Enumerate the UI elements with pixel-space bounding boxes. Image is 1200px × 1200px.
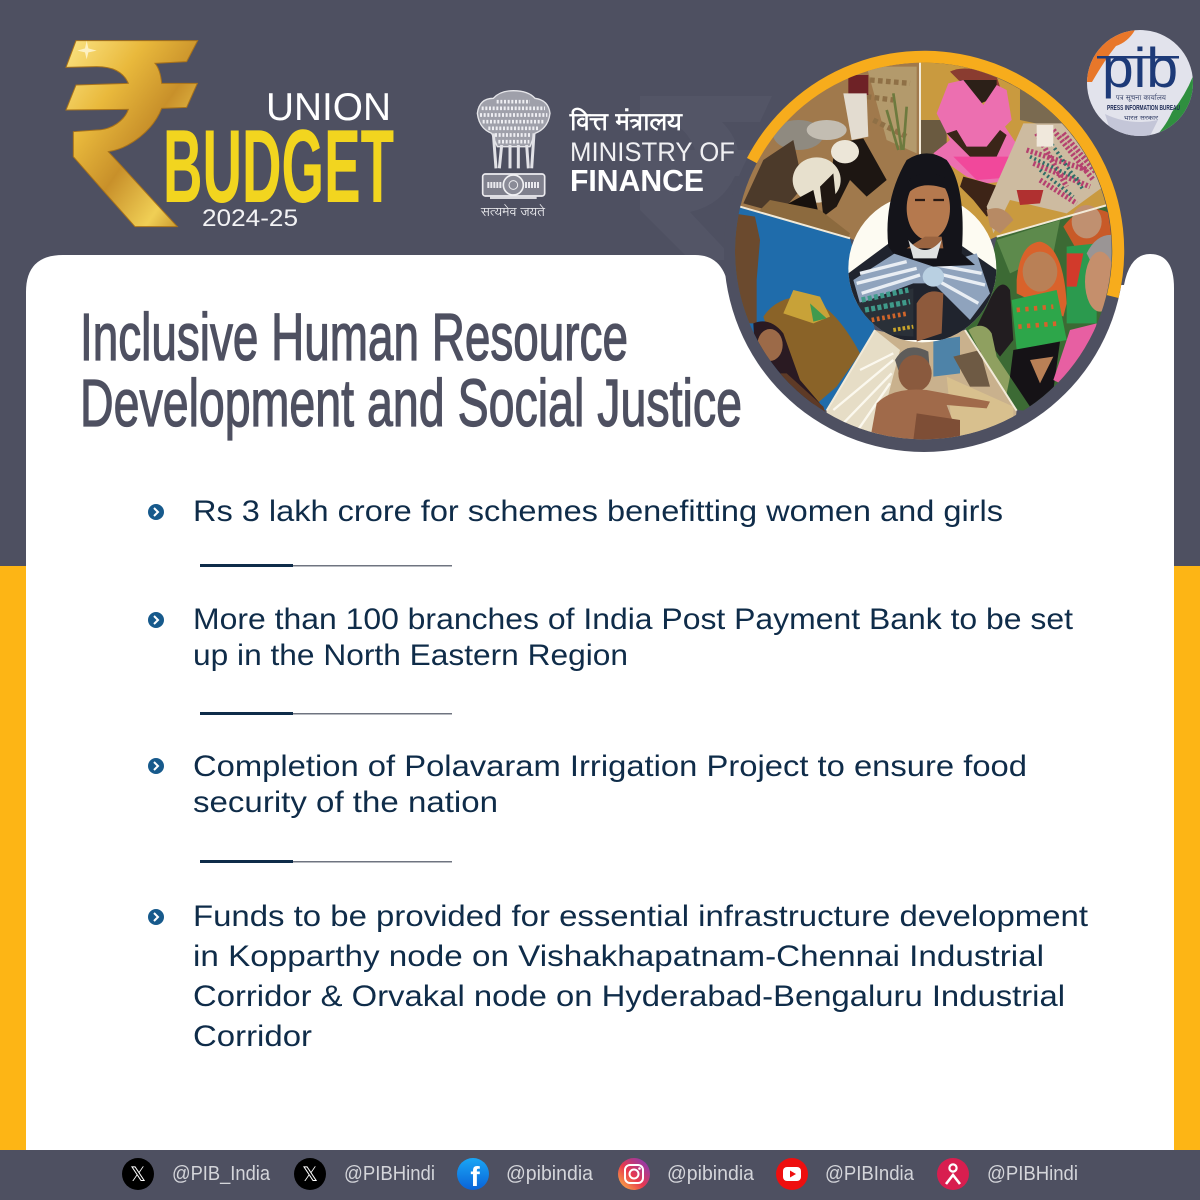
- logo: Union Budget 2024-25: [66, 41, 394, 232]
- icon: X: [122, 1158, 154, 1190]
- handle: @PIBIndia: [825, 1163, 915, 1185]
- text: Corridor: [193, 1020, 312, 1053]
- icon: bullet: [148, 612, 164, 628]
- handle: @PIB_India: [172, 1163, 271, 1185]
- icon: X: [294, 1158, 326, 1190]
- divider 1: [200, 564, 452, 567]
- spokes: [737, 60, 1113, 411]
- icon: YouTube: [776, 1158, 808, 1190]
- text: Funds to be provided for essential infrastructure development: [193, 900, 1089, 933]
- logo: PIB: [1085, 30, 1196, 140]
- text: in Kopparthy node on Vishakhapatnam-Chennai Industrial: [193, 940, 1044, 973]
- yellow side band: [0, 566, 1200, 1150]
- photo: artisan in pink: [921, 62, 1106, 240]
- icon: X: 𝕏: [302, 1164, 318, 1186]
- text: Rs 3 lakh crore for schemes benefitting women and girls: [193, 495, 1003, 528]
- bullet 4: [148, 900, 1089, 1053]
- text: FINANCE: FINANCE: [570, 163, 704, 198]
- text: Corridor & Orvakal node on Hyderabad-Bengaluru Industrial: [193, 980, 1065, 1013]
- text: UNION: UNION: [266, 86, 391, 129]
- watermark rupee: [640, 96, 772, 260]
- photo collage circle: [724, 52, 1124, 452]
- icon: X: 𝕏: [130, 1164, 146, 1186]
- title: [80, 300, 742, 441]
- handle: @pibindia: [667, 1163, 755, 1185]
- text: MINISTRY OF: MINISTRY OF: [570, 137, 735, 167]
- text: More than 100 branches of India Post Payment Bank to be set: [193, 603, 1074, 636]
- bullet 2: [148, 603, 1074, 672]
- text: pib wordmark: pib: [1102, 36, 1178, 99]
- text: [193, 900, 1089, 1053]
- text: [193, 750, 1027, 819]
- text: Hindi ministry name: वित्त मंत्रालय: [569, 105, 683, 143]
- text: [193, 603, 1074, 672]
- title line 1: Inclusive Human Resource: [80, 300, 628, 375]
- photo: man with wheel: [827, 330, 1017, 440]
- handle: @pibindia: [506, 1163, 594, 1185]
- text: security of the nation: [193, 786, 498, 819]
- handle: @PIBHindi: [987, 1163, 1078, 1185]
- photo: girls in green: [965, 203, 1115, 417]
- divider 2: [200, 712, 452, 715]
- icon: bullet: [148, 504, 164, 520]
- icon: state emblem: [477, 91, 550, 199]
- logo: Ministry of Finance: [477, 91, 735, 223]
- divider 3: [200, 860, 452, 863]
- text: 2024-25: 2024-25: [202, 205, 298, 232]
- photo: goats: [740, 62, 920, 240]
- text: up in the North Eastern Region: [193, 639, 628, 672]
- icon: Facebook: [457, 1158, 489, 1192]
- text: emblem motto: सत्यमेव जयते: [480, 204, 546, 223]
- text: BUDGET: BUDGET: [163, 109, 394, 225]
- icon: bullet: [148, 758, 164, 774]
- icon: Instagram: [618, 1158, 650, 1190]
- title line 2: Development and Social Justice: [80, 366, 742, 441]
- text: Government of India line: भारत सरकार: [1124, 114, 1159, 124]
- icon: Koo-style app: [937, 1158, 969, 1190]
- text: Hindi line: पत्र सूचना कार्यालय: [1115, 92, 1167, 104]
- photo: camel and blue sky: [733, 205, 875, 417]
- panel: white content card: [26, 254, 1174, 1150]
- ring: [724, 52, 1124, 452]
- photo: central woman: [848, 153, 997, 342]
- footer bar: [0, 1150, 1200, 1200]
- handle: @PIBHindi: [344, 1163, 435, 1185]
- icon: bullet: [148, 909, 164, 925]
- bullet 1: [148, 495, 1003, 528]
- icon: Facebook: f: [470, 1161, 480, 1192]
- icon: gold rupee symbol: [66, 41, 198, 227]
- bullet 3: [148, 750, 1027, 819]
- header background: [0, 0, 1200, 566]
- orange arc: [752, 57, 1118, 297]
- text: Completion of Polavaram Irrigation Project to ensure food: [193, 750, 1027, 783]
